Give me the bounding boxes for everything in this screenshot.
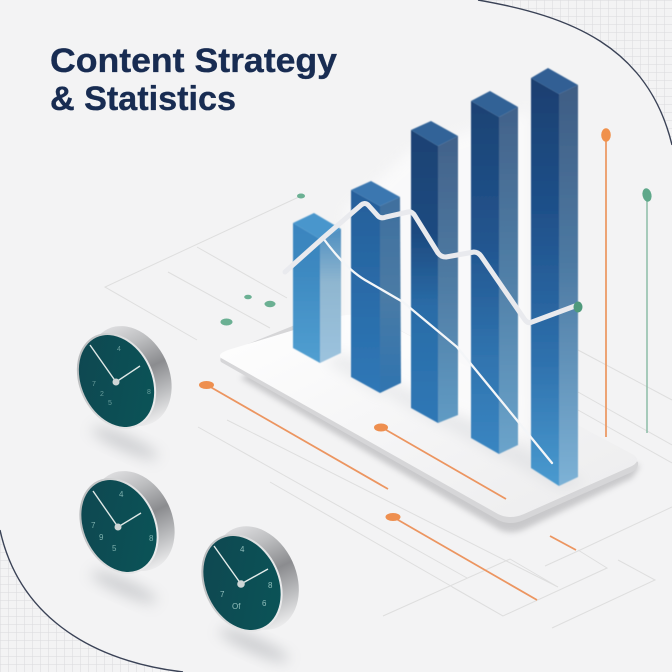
- vertical green marker: [641, 187, 653, 433]
- orange pin line on platform: [374, 424, 506, 499]
- clock 3: 8: [268, 581, 273, 590]
- clock 1: 5: [108, 400, 112, 407]
- clock 2: 9: [99, 533, 104, 542]
- clock 2: 5: [112, 544, 117, 553]
- bar 3: [411, 121, 458, 423]
- clock 1: 4: [117, 346, 121, 353]
- green dots: [220, 194, 305, 326]
- bar chart: five isometric columns: [293, 68, 578, 486]
- title: & Statistics: [50, 80, 236, 118]
- clock 3: Of: [232, 602, 241, 611]
- clock 3: [186, 512, 315, 667]
- bar shadows on platform: [325, 352, 585, 490]
- orange connector lines: [199, 381, 576, 600]
- corner grid: bottom left: [0, 530, 183, 672]
- clock 3: 6: [262, 599, 267, 608]
- clock 3: 4: [240, 545, 245, 554]
- corner grid: top right: [478, 0, 672, 145]
- clock 3: 7: [220, 590, 225, 599]
- clock 2: [64, 457, 190, 608]
- thin white trend line: [323, 238, 552, 463]
- connector: lower: [386, 513, 537, 600]
- title: [50, 42, 337, 118]
- clock 2: 4: [119, 490, 124, 499]
- white glow behind bars: [345, 110, 530, 440]
- clock 1: [62, 312, 187, 464]
- connector: left: [199, 381, 388, 489]
- clock 2: 8: [149, 534, 154, 543]
- bar 1: [293, 213, 341, 363]
- title: Content Strategy: [50, 42, 337, 80]
- thick white trend line with green end dot: [285, 204, 582, 323]
- vertical orange marker: [601, 128, 611, 437]
- clock 1: 8: [147, 389, 151, 396]
- bar 2: [351, 181, 401, 393]
- thin floor guide lines: [105, 196, 672, 628]
- clock 1: 7: [92, 381, 96, 388]
- clock 2: 7: [91, 521, 96, 530]
- bar 4: [471, 91, 518, 454]
- bar 5: [531, 68, 578, 486]
- platform: [220, 315, 640, 532]
- clock 1: 2: [100, 391, 104, 398]
- connector: short: [550, 536, 576, 550]
